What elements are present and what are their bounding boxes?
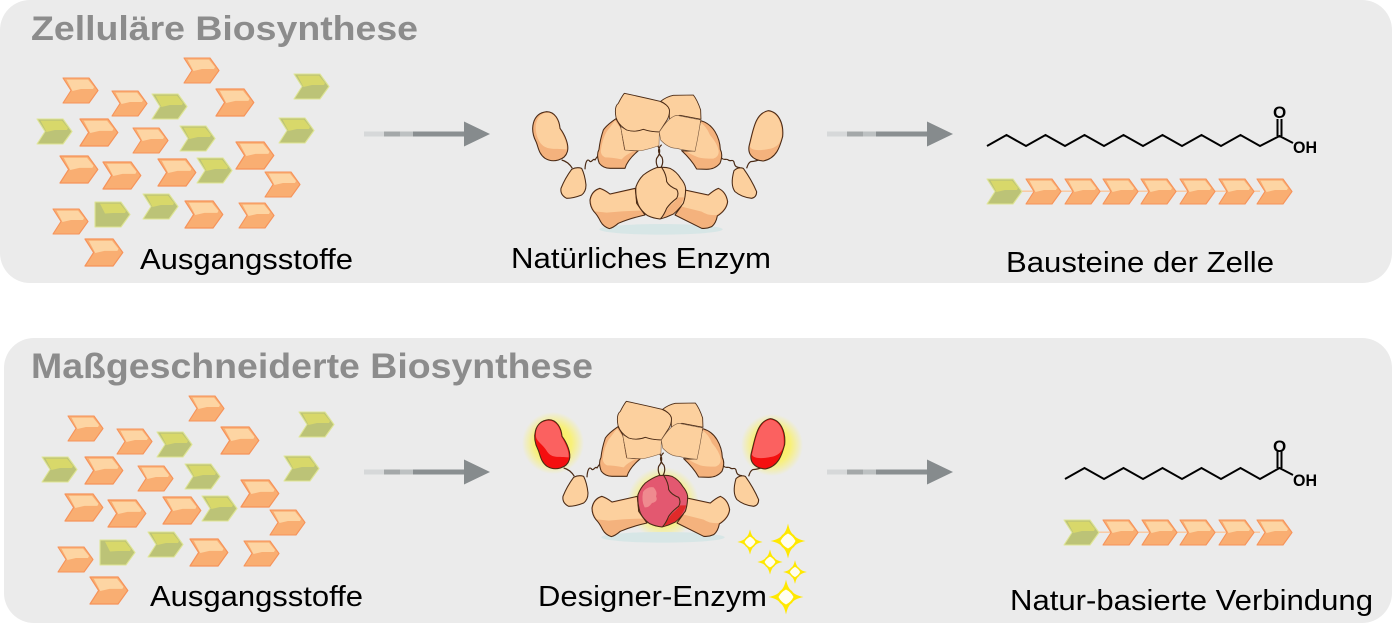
enzyme core: [561, 93, 761, 229]
central red domain: [638, 475, 688, 527]
heading: Zelluläre Biosynthese: [31, 10, 418, 48]
oxygen: O: [1273, 103, 1286, 122]
glow: right domain: [741, 414, 803, 476]
building block chain: [987, 179, 1292, 204]
arrow to product: [827, 460, 953, 484]
right red domain: [751, 419, 785, 469]
left red domain: [535, 420, 570, 469]
starting materials chevrons: [42, 396, 334, 604]
product chain: [1064, 520, 1292, 545]
label: building blocks: Bausteine der Zelle: [1006, 247, 1274, 279]
panel: Maßgeschneiderte Biosynthese: [4, 338, 1392, 623]
icon: natural enzyme: [533, 93, 783, 235]
hydroxyl: OH: [1293, 138, 1317, 157]
label: starting materials: Ausgangsstoffe: [140, 244, 353, 276]
glow: central domain: [627, 467, 699, 539]
enzyme shadow: [601, 532, 725, 543]
green start unit: [987, 179, 1022, 204]
label: designer enzyme: Designer-Enzym: [538, 581, 767, 613]
label: nature-based compound: Natur-basierte Verbindung: [1010, 585, 1373, 617]
sparkles: [737, 524, 807, 614]
molecule: shorter fatty acid: [1065, 437, 1317, 490]
central domain: [636, 167, 686, 219]
right domain: [749, 111, 783, 161]
carboxyl double bond: [1278, 119, 1282, 136]
molecule: fatty acid: [987, 103, 1317, 157]
panel background: [0, 0, 1392, 283]
panel background: [4, 338, 1392, 623]
green start unit: [1064, 520, 1099, 545]
carboxyl double bond: [1278, 451, 1282, 468]
oxygen: O: [1273, 437, 1286, 456]
enzyme core: [563, 401, 763, 537]
label: starting materials: Ausgangsstoffe: [150, 581, 363, 613]
carbon chain: [1065, 468, 1293, 479]
enzyme shadow: [599, 224, 723, 235]
connector: [1095, 532, 1260, 533]
arrow to product: [827, 122, 953, 146]
arrow to enzyme: [364, 122, 490, 146]
connector: [1020, 190, 1260, 192]
icon: designer enzyme: [535, 401, 785, 543]
left domain: [533, 112, 568, 161]
starting materials chevrons: [37, 58, 329, 266]
label: natural enzyme: Natürliches Enzym: [511, 243, 771, 275]
glow: left domain: [522, 412, 584, 474]
hydroxyl: OH: [1293, 471, 1317, 490]
arrow to enzyme: [364, 460, 490, 484]
heading: Maßgeschneiderte Biosynthese: [31, 347, 593, 386]
panel: Zelluläre Biosynthese: [0, 0, 1392, 283]
carbon chain: [987, 135, 1293, 146]
